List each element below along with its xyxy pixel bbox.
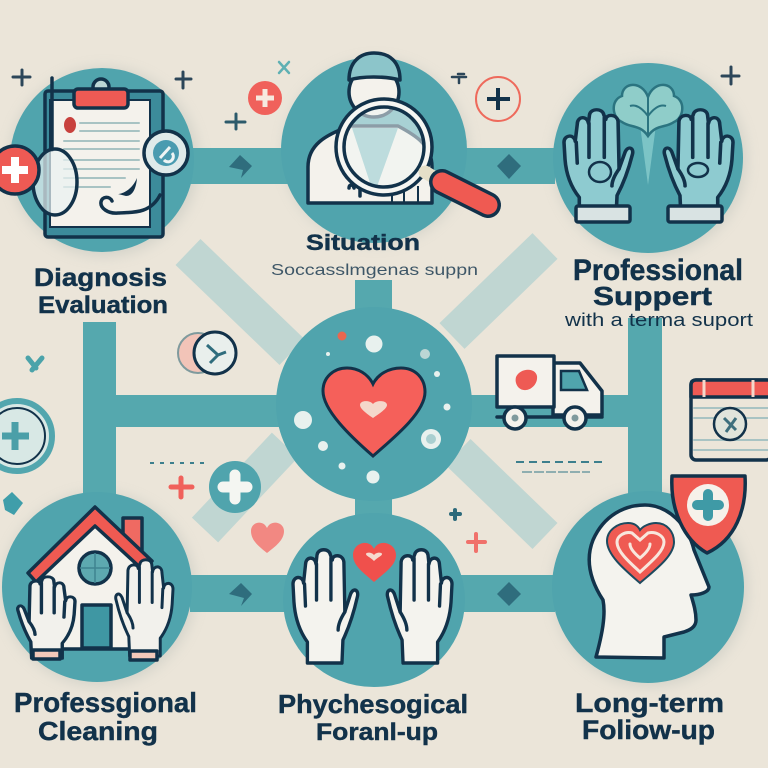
icon: teal plus badge	[209, 461, 261, 513]
icon: calendar case	[691, 380, 768, 460]
panel: professional cleaning	[2, 492, 197, 746]
panel: central heart	[276, 307, 472, 501]
icon: magnifying glass	[336, 99, 488, 205]
floating dots	[294, 332, 450, 484]
circle background	[2, 492, 192, 682]
heading: Phychesogical	[278, 689, 468, 719]
icon: right glove	[664, 110, 733, 222]
panel: situation	[271, 53, 488, 279]
heading	[14, 687, 197, 746]
heading: Cleaning	[38, 716, 158, 746]
heading: Evaluation	[38, 292, 168, 319]
heading	[575, 688, 724, 745]
heading: Foliow-up	[582, 715, 715, 745]
circle background	[552, 491, 744, 683]
icon: doctor	[308, 53, 432, 203]
icon: red plus bubble	[248, 81, 282, 115]
panel: professional support	[553, 63, 753, 330]
circle background	[276, 307, 472, 501]
heading: Professgional	[14, 687, 197, 718]
icon: brain	[614, 85, 682, 185]
icon: house	[28, 507, 152, 649]
heading	[34, 264, 168, 319]
icon: teal gem	[3, 492, 23, 515]
circle shadows	[3, 60, 747, 686]
icon: stethoscope	[33, 131, 188, 215]
icon: small clock badge	[178, 332, 236, 374]
circle background	[10, 68, 194, 252]
icon: left glove	[564, 110, 633, 222]
icon: heart in head	[607, 523, 674, 583]
icon: left medical ring	[0, 401, 52, 471]
heading: Suppert	[593, 281, 712, 311]
heading: Situation	[306, 230, 420, 255]
decorative plus signs	[13, 62, 739, 551]
icon: shield	[672, 476, 745, 553]
pale diagonal connectors	[188, 246, 545, 536]
heading: Long-term	[575, 688, 724, 718]
icon: red plus badge	[0, 146, 39, 194]
panel: psychological follow-up	[278, 513, 468, 746]
icon: right open hand	[387, 550, 452, 663]
circle background	[553, 63, 743, 253]
teal connector network	[83, 148, 662, 612]
icon: heart between hands	[353, 543, 396, 582]
icon: left open hand	[293, 550, 358, 663]
heading: Diagnosis	[34, 264, 167, 292]
icon: left cleaning glove	[18, 577, 75, 659]
icon: small heart	[251, 523, 284, 553]
icon: head profile	[589, 505, 709, 658]
dotted text lines	[150, 462, 606, 472]
connector arrows	[229, 154, 521, 606]
circle background	[283, 513, 465, 687]
subheading: with a terma suport	[564, 310, 753, 330]
subheading: Soccasslmgenas suppn	[271, 262, 478, 279]
heading: Foranl-up	[316, 719, 438, 746]
icon: delivery truck	[497, 356, 602, 429]
heading	[278, 689, 468, 746]
panel: long-term follow-up	[552, 476, 745, 745]
panel: diagnosis evaluation	[0, 68, 194, 319]
icon: heart	[323, 368, 425, 456]
icon: clipboard	[45, 78, 163, 237]
icon: outlined plus ring	[476, 77, 520, 121]
circle background	[281, 57, 467, 243]
icon: right cleaning glove	[116, 560, 173, 660]
heading: Professional	[573, 254, 743, 287]
heading	[573, 254, 743, 311]
